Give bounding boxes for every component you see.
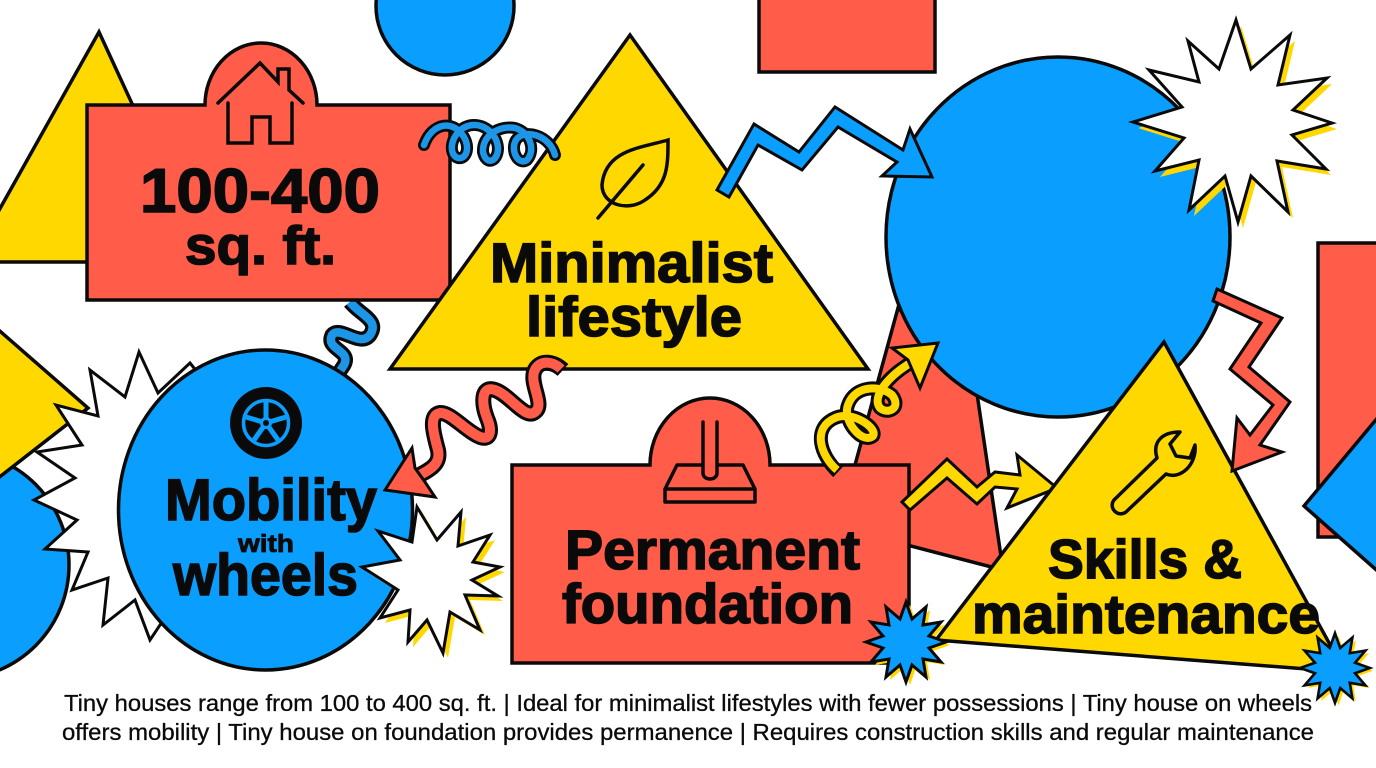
label: Mobility: Mobility — [165, 468, 377, 533]
arrow: blue curl — [424, 125, 555, 161]
panel: mobility with wheels — [118, 350, 412, 670]
label: foundation: foundation — [562, 572, 853, 635]
panel: minimalist lifestyle — [390, 35, 868, 369]
background shape: top blue circle — [376, 0, 514, 75]
starburst: top right — [1133, 20, 1337, 228]
label: Minimalist: Minimalist — [490, 231, 773, 294]
arrow: red wave — [385, 363, 563, 497]
label: sq. ft.: sq. ft. — [185, 216, 336, 276]
arrow: yellow curl — [821, 343, 938, 472]
footer text — [62, 690, 1314, 745]
footer text: Tiny houses range from 100 to 400 sq. ft. | Ideal for minimalist lifestyles with fewer possessions | Tiny house on wheels — [64, 690, 1312, 716]
red box with dome — [512, 398, 909, 663]
label: with: with — [237, 530, 294, 558]
icon: leaf — [598, 140, 668, 218]
starburst: blue small left — [866, 602, 950, 685]
yellow triangle — [936, 342, 1345, 672]
background shape: left yellow triangle — [0, 305, 88, 500]
background shape: top red rectangle — [759, 0, 935, 72]
arrow: blue wave — [331, 302, 373, 374]
background shape: left yellow triangle — [0, 32, 205, 262]
label: Skills &: Skills & — [1048, 528, 1242, 590]
icon: wheel — [230, 387, 302, 459]
arrow: blue zigzag — [717, 107, 932, 197]
label: lifestyle: lifestyle — [526, 285, 742, 348]
background shape: right blue diamond — [1304, 403, 1376, 582]
yellow triangle — [390, 35, 868, 369]
panel: permanent foundation — [512, 398, 909, 663]
label: 100-400: 100-400 — [140, 157, 380, 226]
arrow: red zigzag — [1213, 289, 1290, 471]
label: Permanent: Permanent — [565, 518, 860, 581]
background shape: red trapezoid — [838, 308, 1003, 570]
label: wheels: wheels — [172, 543, 358, 608]
label: maintenance: maintenance — [972, 583, 1320, 645]
red box with dome — [87, 43, 450, 300]
starburst: blue small right — [1300, 633, 1373, 705]
icon: wrench — [1112, 432, 1195, 514]
big blue circle — [886, 57, 1230, 417]
starburst: left large — [34, 352, 300, 640]
panel: 100-400 sq. ft. — [87, 43, 450, 300]
icon: house — [218, 63, 303, 143]
starburst: small white — [362, 507, 505, 658]
footer text: offers mobility | Tiny house on foundation provides permanence | Requires construction skills and regular maintenance — [62, 719, 1314, 745]
blue circle — [118, 350, 412, 670]
panel: skills and maintenance — [936, 342, 1345, 672]
background shape: right red rectangle — [1318, 243, 1376, 537]
icon: foundation post — [665, 422, 755, 502]
arrow: yellow zigzag — [902, 455, 1057, 510]
background shape: left blue circle — [0, 451, 69, 679]
